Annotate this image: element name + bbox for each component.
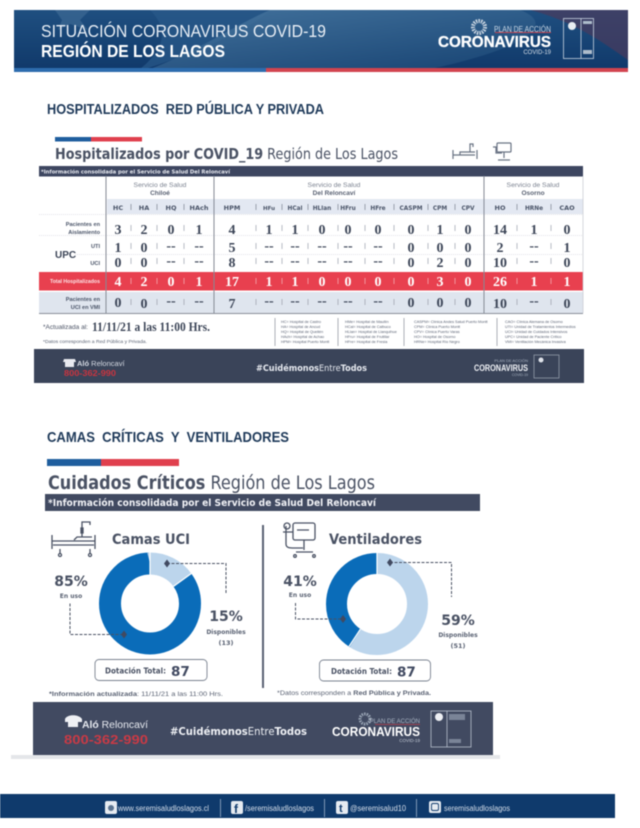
row: UCI: 0 <box>408 256 414 271</box>
row labels: Total Hospitalizados <box>50 279 100 285</box>
logo: ministerio <box>431 711 471 747</box>
hospital legend: HLlan= Hospital de Llanquihue <box>345 330 397 334</box>
callout: en uso 41%: 41% <box>283 574 317 590</box>
row: UCI en VMI: -- <box>317 294 327 309</box>
update note <box>43 319 210 345</box>
table title: Hospitalizados por COVID_19 Región de Los Lagos <box>55 145 398 163</box>
column headers: CPV <box>462 206 475 212</box>
icon: phone <box>65 715 82 727</box>
row: aislamiento: 1 <box>436 223 444 238</box>
row: UTI: -- <box>290 239 300 254</box>
callout: disponibles 59%: Disponibles <box>438 632 478 639</box>
title: camas UCI: Camas UCI <box>112 532 190 548</box>
hospital legend: HA= Hospital de Ancud <box>281 325 320 329</box>
donut chart: ventiladores <box>336 552 418 646</box>
hospital legend: CAO= Clínica Alemana de Osorno <box>505 320 563 324</box>
callout: disponibles 15% <box>164 560 246 647</box>
callout: en uso 41% <box>283 574 346 623</box>
hospital legend: CPM= Clínica Puerto Montt <box>414 325 461 329</box>
footnote: actualización: *Información actualizada : 11/11/21 a las 11:00 Hrs. <box>49 691 223 698</box>
column headers: CAO <box>559 204 575 212</box>
info bar <box>39 166 583 176</box>
social: instagram <box>429 801 510 813</box>
column headers: CPM <box>433 206 447 212</box>
hospital legend: HRNe= Hospital Río Negro <box>414 340 460 344</box>
row labels: Aislamiento <box>68 230 101 236</box>
group headers: Chiloé <box>150 190 170 197</box>
logo: plan de acción coronavirus <box>332 714 420 743</box>
row: total hospitalizados: 0 <box>168 275 174 290</box>
group headers: Osorno <box>521 190 545 197</box>
column headers: HQ <box>166 204 177 212</box>
row: aislamiento: 1 <box>196 223 202 238</box>
accent bar <box>47 459 179 466</box>
callout: disponibles 15%: Disponibles <box>206 629 246 636</box>
row: UTI: 0 <box>140 241 148 256</box>
row: UTI: -- <box>194 239 204 254</box>
update note: 11/11/21 a las 11:00 Hrs. <box>92 319 210 334</box>
logo: plan de acción coronavirus: COVID-19 <box>399 738 420 743</box>
row: UTI: 0 <box>408 241 414 256</box>
icon: hospital bed <box>52 522 95 556</box>
section: camas UCI <box>49 522 246 698</box>
row: UCI: -- <box>317 254 327 269</box>
row: UTI: 0 <box>464 241 472 256</box>
row: UCI: -- <box>373 254 383 269</box>
table footer band: #CuidémonosEntreTodos <box>256 363 367 374</box>
hospital legend: UCI= Unidad de Cuidados Intensivos <box>505 330 567 334</box>
row: total hospitalizados: 1 <box>564 275 570 290</box>
callout: disponibles 59% <box>387 558 478 650</box>
column headers: HLlan <box>313 206 331 212</box>
row: UTI: -- <box>373 239 383 254</box>
section: ventiladores <box>277 523 478 697</box>
row: UCI en VMI: 10 <box>493 297 507 312</box>
icon: bed <box>453 144 477 159</box>
row: UTI: 0 <box>436 241 444 256</box>
row: aislamiento: 2 <box>140 223 148 238</box>
table footer band <box>34 349 584 383</box>
bottom social bar <box>0 794 615 818</box>
hospital legend: CPV= Clínica Puerto Varas <box>414 330 460 334</box>
table bands <box>39 176 583 314</box>
row: UCI en VMI: -- <box>343 294 353 309</box>
row: UCI: 0 <box>114 256 122 271</box>
row: UCI en VMI: -- <box>373 294 383 309</box>
row: UTI <box>114 239 570 256</box>
header banner <box>14 10 628 72</box>
row: total hospitalizados: 0 <box>318 275 326 290</box>
row labels: UCI en VMI <box>71 305 100 311</box>
column headers: HRNe <box>525 206 543 212</box>
row: aislamiento: 14 <box>493 223 507 238</box>
row: UTI: 2 <box>496 241 504 256</box>
logo: plan de acción coronavirus: PLAN DE ACCIÓN <box>370 718 420 725</box>
box: dotación total <box>95 660 207 680</box>
group headers <box>134 182 560 197</box>
callout: en uso 85%: En uso <box>60 593 82 600</box>
heading: camas críticas: CAMAS CRÍTICAS Y VENTILADORES <box>47 429 289 446</box>
panel title: Cuidados Críticos Región de Los Lagos <box>48 472 375 494</box>
row: UCI <box>114 254 570 271</box>
box: dotación total: Dotación Total: <box>331 667 392 676</box>
group headers: Servicio de Salud <box>507 182 560 189</box>
row labels: Pacientes en <box>66 222 101 228</box>
row: total hospitalizados: 17 <box>225 275 239 290</box>
hospital legend: HC= Hospital de Castro <box>281 320 321 324</box>
row: UCI en VMI: 0 <box>140 297 148 312</box>
header logo: plan de acción coronavirus: COVID-19 <box>523 50 552 56</box>
hospital legend: HMe= Hospital de Maullín <box>345 320 389 324</box>
info bar: *Información consolidada por el Servicio de Salud Del Reloncaví <box>48 498 377 509</box>
row: UCI en VMI: -- <box>529 294 539 309</box>
callout: en uso 85% <box>54 574 127 638</box>
row: UCI: -- <box>343 254 353 269</box>
row: UCI: -- <box>166 254 176 269</box>
footnote: datos: *Datos corresponden a Red Pública y Privada. <box>277 690 431 697</box>
row: aislamiento: 1 <box>530 223 538 238</box>
table footer band: 800-362-990 <box>64 368 116 378</box>
row: total hospitalizados: 1 <box>196 275 202 290</box>
row: UCI: 0 <box>140 256 148 271</box>
social: instagram: seremisaludloslagos <box>444 804 510 813</box>
table footer band: COVID-19 <box>512 373 528 377</box>
row: total hospitalizados: 0 <box>408 275 414 290</box>
column headers: HFu <box>263 206 275 212</box>
social: twitter: t <box>339 803 343 815</box>
heading: hospitalizados: HOSPITALIZADOS RED PÚBLICA Y PRIVADA <box>47 100 324 118</box>
row: total hospitalizados <box>114 275 570 290</box>
column headers: HO <box>495 204 506 212</box>
row: UCI en VMI: 0 <box>114 296 122 311</box>
row: UCI: 10 <box>493 256 507 271</box>
hospital legend: HPM= Hospital Puerto Montt <box>281 340 330 344</box>
box: dotación total <box>320 660 430 681</box>
header logo: plan de acción coronavirus: CORONAVIRUS <box>438 34 551 51</box>
row: aislamiento: 0 <box>168 223 174 238</box>
callout: disponibles 59%: (51) <box>450 642 466 650</box>
row: aislamiento <box>114 223 570 238</box>
row: UCI: 2 <box>436 256 444 271</box>
header title: SITUACIÓN CORONAVIRUS COVID-19 <box>41 20 326 41</box>
row: UCI: -- <box>194 254 204 269</box>
row: UTI: -- <box>166 239 176 254</box>
row: UTI: -- <box>529 239 539 254</box>
row: UCI en VMI: -- <box>290 294 300 309</box>
row: aislamiento: 1 <box>266 223 272 238</box>
group headers: Servicio de Salud <box>308 182 361 189</box>
info bar: *Información consolidada por el Servicio de Salud Del Reloncaví <box>41 168 230 176</box>
row labels: UCI <box>90 261 100 267</box>
hospital legend: HAch= Hospital de Achao <box>281 335 324 339</box>
accent bar <box>55 137 142 142</box>
social: facebook: /seremisaludloslagos <box>245 804 314 813</box>
row: aislamiento: 4 <box>228 223 236 238</box>
row: total hospitalizados: 1 <box>292 275 298 290</box>
table footer band: Aló Reloncaví <box>77 359 125 368</box>
callout: en uso 41%: En uso <box>289 592 311 599</box>
social: facebook: f <box>234 802 239 816</box>
row: total hospitalizados: 26 <box>493 275 507 290</box>
panel: hospitalizados table <box>34 137 584 383</box>
hotline <box>64 720 148 747</box>
header logo: plan de acción coronavirus <box>438 21 552 56</box>
row: UCI en VMI: 7 <box>228 297 236 312</box>
hospital legend <box>275 318 576 346</box>
row labels <box>50 222 101 311</box>
table footer band: PLAN DE ACCIÓN <box>494 358 528 363</box>
row: UTI: 5 <box>228 241 236 256</box>
row: total hospitalizados: 3 <box>436 275 444 290</box>
row: aislamiento: 0 <box>408 223 414 238</box>
row: UTI: 1 <box>564 241 570 256</box>
row: aislamiento: 0 <box>374 223 382 238</box>
row: UCI en VMI: 0 <box>408 296 414 311</box>
column headers: CASPM <box>400 206 423 212</box>
box: dotación total: 87 <box>171 664 190 680</box>
column headers: HPM <box>224 204 240 212</box>
social: facebook <box>231 801 314 816</box>
hospital legend: UTI= Unidad de Tratamientos Intermedios <box>505 325 576 329</box>
row: aislamiento: 0 <box>464 223 472 238</box>
hospital legend: VMI= Ventilación Mecánica Invasiva <box>505 340 567 344</box>
hospital legend: HQ= Hospital de Queilén <box>281 330 323 334</box>
icon: ventilator <box>283 523 315 557</box>
row: total hospitalizados: 4 <box>114 275 122 290</box>
row: UCI en VMI: 0 <box>464 296 472 311</box>
column headers: HCal <box>287 206 303 212</box>
column headers: HAch <box>190 204 209 212</box>
row: UCI: 0 <box>464 256 472 271</box>
hospital legend: HFre= Hospital de Fresia <box>345 340 388 344</box>
row labels: UTI <box>91 244 100 250</box>
row: total hospitalizados: 0 <box>464 275 472 290</box>
row: total hospitalizados: 2 <box>140 275 148 290</box>
row: UTI: -- <box>317 239 327 254</box>
column headers <box>113 204 575 212</box>
row: UCI en VMI: -- <box>264 294 274 309</box>
row: UCI: -- <box>529 254 539 269</box>
icon: ventilator <box>493 143 511 160</box>
row: UCI en VMI: -- <box>194 294 204 309</box>
hospital legend: HCal= Hospital de Calbuco <box>345 325 391 329</box>
row labels: UPC <box>55 250 76 261</box>
row: UTI: 1 <box>114 241 122 256</box>
divider <box>262 525 264 688</box>
panel footer band <box>11 702 500 759</box>
logo: plan de acción coronavirus: CORONAVIRUS <box>332 724 420 739</box>
hotline: Aló Reloncaví <box>82 720 148 731</box>
row: total hospitalizados: 1 <box>266 275 272 290</box>
row: UCI: -- <box>264 254 274 269</box>
column headers: HFru <box>340 206 356 212</box>
title: ventiladores: Ventiladores <box>329 532 422 548</box>
callout: disponibles 59%: 59% <box>441 613 475 629</box>
column headers: HA <box>139 204 149 212</box>
hotline: 800-362-990 <box>64 733 148 747</box>
column headers: HFre <box>370 206 386 212</box>
box: dotación total: Dotación Total: <box>105 666 166 676</box>
row: aislamiento: 0 <box>318 223 326 238</box>
donut chart: camas UCI <box>110 552 192 644</box>
header title <box>41 20 326 61</box>
hospital legend: HO= Hospital de Osorno <box>414 335 455 339</box>
hospital legend: CASPM= Clínica Andes Salud Puerto Montt <box>414 320 488 324</box>
group headers: Servicio de Salud <box>134 182 187 189</box>
header logo: plan de acción coronavirus: PLAN DE ACCIÓN <box>494 24 551 34</box>
row: total hospitalizados: 0 <box>344 275 352 290</box>
callout: disponibles 15%: (13) <box>218 639 234 647</box>
row: aislamiento: 0 <box>344 223 352 238</box>
social: twitter: @seremisalud10 <box>350 804 407 813</box>
social: web <box>105 801 209 814</box>
hashtag: #CuidémonosEntreTodos <box>170 725 307 738</box>
row: UCI: -- <box>290 254 300 269</box>
row: aislamiento: 1 <box>292 223 298 238</box>
row: UCI en VMI <box>114 294 570 312</box>
row: UCI en VMI: 0 <box>436 296 444 311</box>
row: aislamiento: 0 <box>564 223 570 238</box>
update note: *Datos corresponden a Red Pública y Privada. <box>43 339 147 345</box>
row: UCI en VMI: -- <box>166 294 176 309</box>
callout: disponibles 15%: 15% <box>209 609 243 625</box>
panel: cuidados críticos <box>0 459 615 818</box>
row: total hospitalizados: 1 <box>530 275 538 290</box>
hospital legend: HFru= Hospital de Frutillar <box>345 335 390 339</box>
hospital legend: UPC= Unidad de Paciente Crítico <box>505 335 561 339</box>
header logo: ministerio <box>564 18 594 58</box>
update note: *Actualizada al: <box>43 324 88 331</box>
row labels: Pacientes en <box>66 297 101 303</box>
row: UCI en VMI: 0 <box>564 297 570 312</box>
info bar <box>45 494 480 511</box>
row: total hospitalizados: 0 <box>374 275 382 290</box>
row: UTI: -- <box>343 239 353 254</box>
header title: REGIÓN DE LOS LAGOS <box>41 40 225 61</box>
row: UCI: 8 <box>228 256 236 271</box>
row: aislamiento: 3 <box>114 223 122 238</box>
social: web: www.seremisaludloslagos.cl <box>117 804 209 813</box>
column headers: HC <box>113 204 123 212</box>
table footer band: CORONAVIRUS <box>474 363 528 373</box>
row: UTI: -- <box>264 239 274 254</box>
group headers: Del Reloncaví <box>313 190 356 197</box>
social: twitter <box>336 801 407 815</box>
box: dotación total: 87 <box>397 664 416 680</box>
row: UCI: 0 <box>564 256 570 271</box>
callout: en uso 85%: 85% <box>54 574 88 590</box>
